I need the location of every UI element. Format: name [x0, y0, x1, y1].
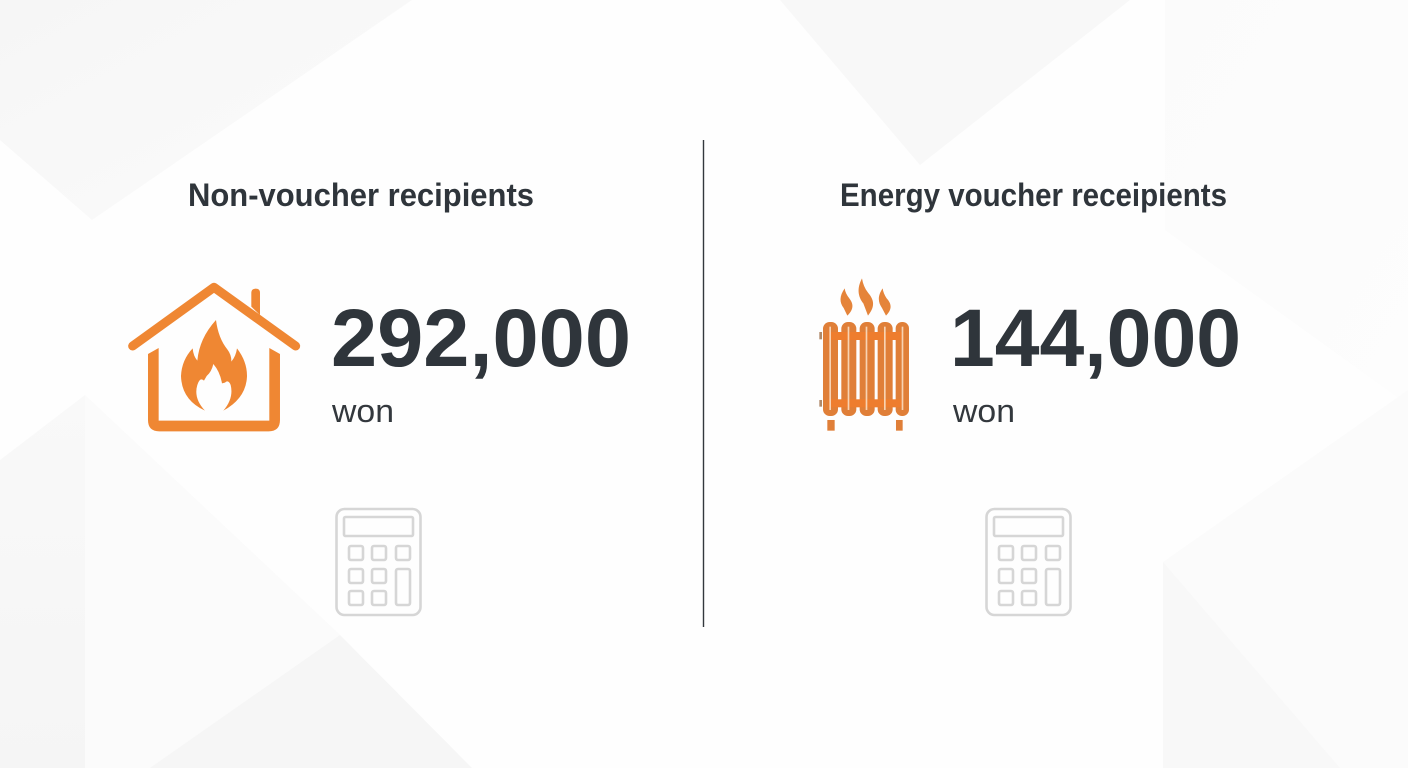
panel: energy voucher recipients [819, 177, 1241, 615]
icon: calculator [986, 509, 1070, 615]
panel: non-voucher recipients [133, 177, 631, 615]
icon: calculator [336, 509, 420, 615]
value: 144,000: 144,000 [950, 293, 1241, 384]
value: 292,000: 292,000 [331, 293, 631, 384]
heading: non-voucher recipients: Non-voucher recipients [188, 177, 534, 213]
unit: won: won [331, 393, 394, 429]
icon: radiator with steam [819, 278, 909, 431]
unit: won: won [952, 393, 1015, 429]
icon: house with flame [133, 287, 296, 431]
divider line [702, 140, 704, 627]
heading: energy voucher recipients: Energy voucher receipients [840, 177, 1227, 213]
